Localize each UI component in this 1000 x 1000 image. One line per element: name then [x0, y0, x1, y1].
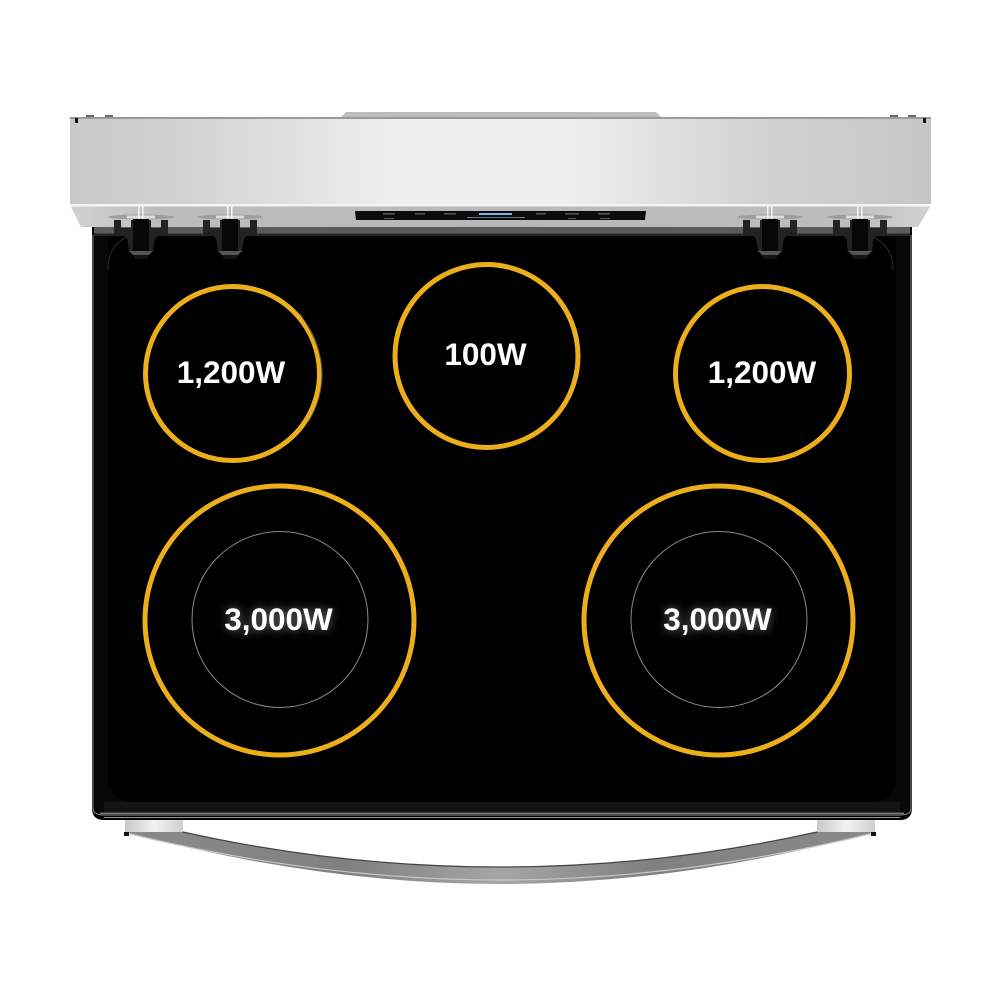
- oven handle: [124, 820, 876, 884]
- element: rear right 1,200W: 1,200W: [708, 354, 817, 390]
- control display: [355, 211, 646, 220]
- hinge: far right: [827, 205, 893, 259]
- control panel housing: [70, 117, 931, 227]
- element: rear right 1,200W: [676, 286, 850, 460]
- rear panel fasteners: [86, 115, 916, 118]
- element: rear left 1,200W: 1,200W: [177, 354, 286, 390]
- element: front left 3,000W: 3,000W: [224, 601, 333, 637]
- element: center 100W: 100W: [444, 336, 527, 372]
- element: front right 3,000W: [584, 486, 853, 755]
- element: rear left 1,200W: [146, 286, 322, 460]
- element: front left 3,000W: [145, 486, 414, 755]
- rear vent strip: [341, 112, 661, 117]
- hinge: right: [737, 205, 803, 259]
- cooktop body: [92, 225, 912, 820]
- element: front right 3,000W: 3,000W: [663, 601, 772, 637]
- element: front right 3,000W: 3,000W: [663, 601, 772, 637]
- element: front left 3,000W: 3,000W: [224, 601, 333, 637]
- hinge: far left: [108, 205, 174, 259]
- element: center 100W: [395, 264, 578, 448]
- hinge: left: [197, 205, 263, 259]
